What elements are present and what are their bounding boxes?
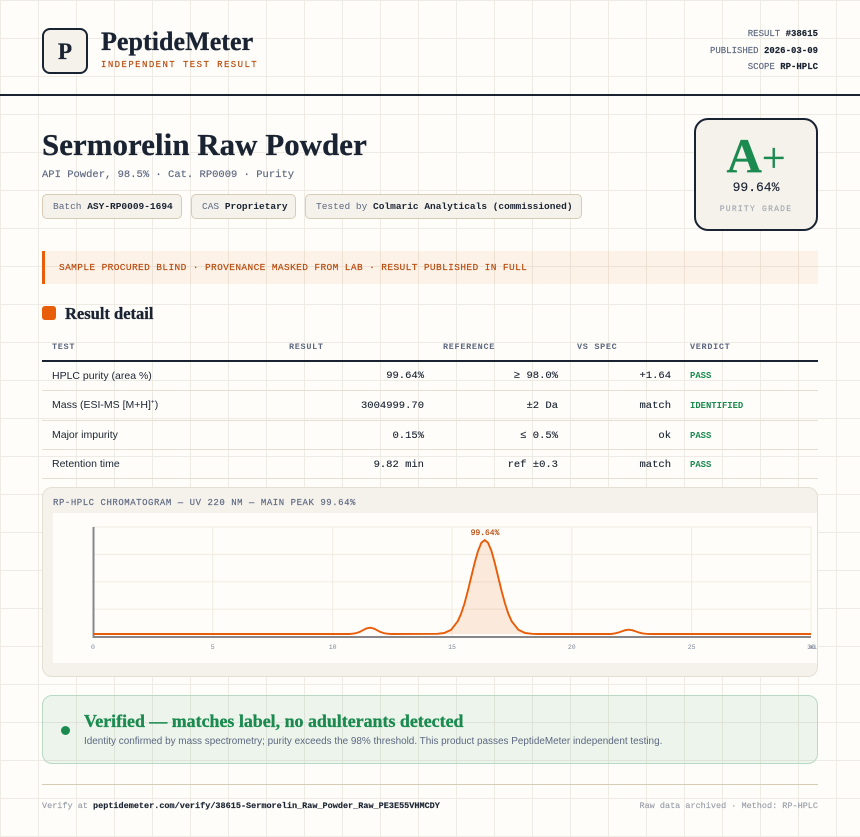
grade letter: A+ [726, 128, 786, 183]
product title: Sermorelin Raw Powder [42, 128, 367, 162]
column: reference: REFERENCE [443, 342, 495, 352]
row: mass: ±2 Da [526, 400, 558, 412]
published date: PUBLISHED 2026-03-09 [710, 46, 818, 56]
result number: RESULT #38615 [748, 29, 818, 39]
verdict detail: Identity confirmed by mass spectrometry; purity exceeds the 98% threshold. This product passes PeptideMeter independent testing. [84, 736, 662, 747]
results table [42, 342, 818, 479]
row: retention time: PASS [690, 460, 711, 470]
purity value: 99.64% [733, 180, 779, 195]
section heading: Result detail [65, 304, 153, 323]
row: HPLC purity: +1.64 [639, 370, 671, 382]
row: retention time: Retention time [52, 458, 120, 470]
row: HPLC purity: 99.64% [386, 370, 424, 382]
peak label: 99.64% [471, 529, 500, 538]
brand tagline: INDEPENDENT TEST RESULT [101, 60, 258, 70]
row: mass [42, 391, 818, 421]
scope: SCOPE RP-HPLC [748, 62, 818, 72]
row: major impurity: ok [658, 430, 671, 442]
chip: tested by [305, 194, 582, 219]
row: retention time: match [639, 459, 671, 471]
row: retention time [42, 450, 818, 479]
row: retention time: 9.82 min [374, 459, 424, 471]
column: verdict: VERDICT [690, 342, 730, 352]
chart [53, 513, 818, 663]
row: HPLC purity: HPLC purity (area %) [52, 370, 152, 382]
row: mass: match [639, 400, 671, 412]
chart title: RP-HPLC CHROMATOGRAM — UV 220 NM — MAIN PEAK 99.64% [53, 498, 356, 508]
x axis labels: 0 [91, 644, 95, 651]
row: retention time: ref ±0.3 [508, 459, 558, 471]
product subtitle: API Powder, 98.5% · Cat. RP0009 · Purity [42, 169, 294, 181]
verify link: Verify at peptidemeter.com/verify/38615-Sermorelin_Raw_Powder_Raw_PE3E55VHMCDY [42, 801, 440, 811]
row: mass: IDENTIFIED [690, 401, 743, 411]
icon: status dot [61, 726, 70, 735]
notice banner [42, 251, 818, 284]
section marker [42, 306, 56, 320]
peak area [438, 540, 532, 634]
x axis labels: 25 [688, 644, 696, 651]
x axis labels: 5 [211, 644, 215, 651]
archive note: Raw data archived · Method: RP-HPLC [639, 801, 818, 811]
axes [94, 527, 811, 637]
brand name: PeptideMeter [101, 27, 253, 56]
chromatogram panel [42, 487, 818, 677]
row: mass: Mass (ESI-MS [M+H]+) [52, 398, 158, 411]
x axis labels: 10 [329, 644, 337, 651]
row: HPLC purity: PASS [690, 371, 711, 381]
chip: CAS [191, 194, 296, 219]
column: vs spec: VS SPEC [577, 342, 617, 352]
icon: logo P [42, 28, 88, 74]
x axis labels: 30 [807, 644, 815, 651]
row: major impurity: Major impurity [52, 429, 118, 441]
row: major impurity: ≤ 0.5% [520, 430, 558, 442]
table header [42, 336, 818, 362]
verified banner [42, 695, 818, 764]
trace [93, 540, 811, 634]
x axis labels [91, 644, 821, 651]
notice banner: SAMPLE PROCURED BLIND · PROVENANCE MASKED FROM LAB · RESULT PUBLISHED IN FULL [59, 262, 527, 273]
grade card [694, 118, 818, 231]
chip: tested by: Tested by Colmaric Analyticals (commissioned) [316, 201, 573, 212]
grade caption: PURITY GRADE [720, 205, 792, 214]
row: major impurity: 0.15% [392, 430, 424, 442]
x axis labels: 15 [448, 644, 456, 651]
row: HPLC purity: ≥ 98.0% [514, 370, 558, 382]
column: test: TEST [52, 342, 75, 352]
chip: batch: Batch ASY-RP0009-1694 [53, 201, 173, 212]
footer [42, 784, 818, 814]
row: major impurity: PASS [690, 431, 711, 441]
x axis labels: 20 [568, 644, 576, 651]
column: result: RESULT [289, 342, 324, 352]
row: HPLC purity [42, 361, 818, 391]
header: brand and result metadata [0, 0, 860, 96]
chip: batch [42, 194, 182, 219]
row: major impurity [42, 421, 818, 450]
row: mass: 3004999.70 [361, 400, 424, 412]
verdict heading: Verified — matches label, no adulterants detected [84, 711, 463, 731]
chip: CAS: CAS Proprietary [202, 201, 288, 212]
icon: logo P: P [58, 39, 72, 64]
